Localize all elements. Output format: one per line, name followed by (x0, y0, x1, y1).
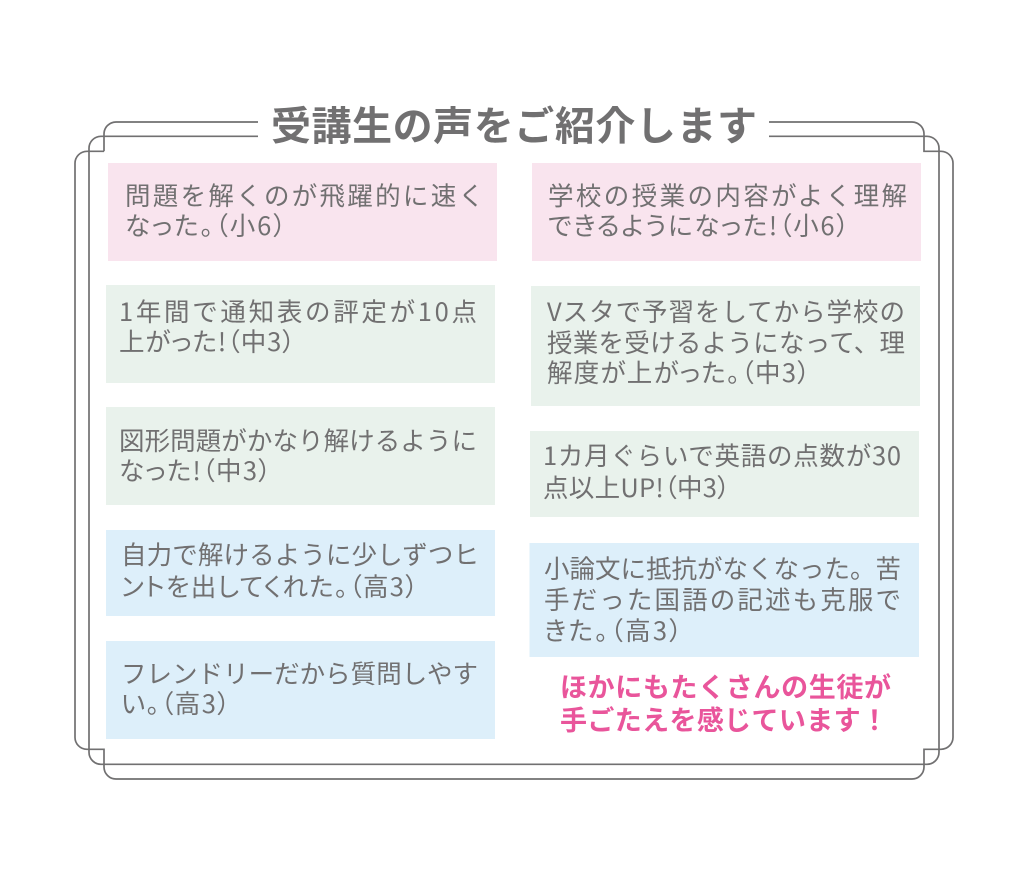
card: high school, friendly: い。（高3） (121, 684, 230, 721)
card: junior high, V-Study preview: Vスタで予習をしてから学校の (547, 292, 905, 329)
stacked frame outline (75, 122, 953, 779)
card: elementary, faster solving: 問題を解くのが飛躍的に速く (125, 176, 484, 213)
card: high school, hints (106, 530, 495, 616)
card: junior high, V-Study preview (531, 286, 920, 406)
card: high school, essay and Japanese: 手だった国語の記述も克服で (544, 580, 901, 617)
card: high school, essay and Japanese: 小論文に抵抗がなくなった。苦 (544, 549, 901, 586)
card: high school, hints: 自力で解けるように少しずつヒ (121, 535, 479, 572)
card: high school, hints: ントを出してくれた。（高3） (121, 567, 418, 604)
card: junior high, report card: 1年間で通知表の評定が10点 (119, 292, 477, 329)
card: junior high, English score (530, 431, 919, 517)
pink closing message (560, 666, 891, 738)
card: elementary, faster solving (108, 163, 497, 261)
card: elementary, faster solving: なった。（小6） (125, 206, 286, 243)
card: junior high, report card: 上がった!（中3） (119, 322, 295, 359)
card: high school, friendly: フレンドリーだから質問しやす (121, 654, 478, 691)
card: junior high, figure problems: 図形問題がかなり解けるように (119, 421, 477, 458)
card: high school, essay and Japanese (530, 543, 919, 657)
card: junior high, V-Study preview: 解度が上がった。（中3） (547, 353, 810, 390)
card: elementary, understanding class: 学校の授業の内容がよく理解 (548, 176, 907, 213)
card: high school, friendly (106, 641, 495, 739)
card: junior high, figure problems: なった!（中3） (119, 451, 271, 488)
pink closing message: 手ごたえを感じています！ (560, 699, 888, 738)
card: junior high, English score: 1カ月ぐらいで英語の点数が30 (543, 436, 901, 473)
pink closing message: ほかにもたくさんの生徒が (560, 666, 891, 705)
title: 受講生の声をご紹介します (271, 94, 757, 152)
card: elementary, understanding class (532, 163, 921, 261)
card: junior high, report card (106, 285, 495, 383)
card: elementary, understanding class: できるようになった!（小6） (548, 206, 849, 243)
card: high school, essay and Japanese: きた。（高3） (544, 611, 682, 648)
card: junior high, figure problems (106, 407, 495, 505)
card: junior high, English score: 点以上UP!（中3） (543, 468, 730, 505)
card: junior high, V-Study preview: 授業を受けるようになって、理 (547, 323, 905, 360)
